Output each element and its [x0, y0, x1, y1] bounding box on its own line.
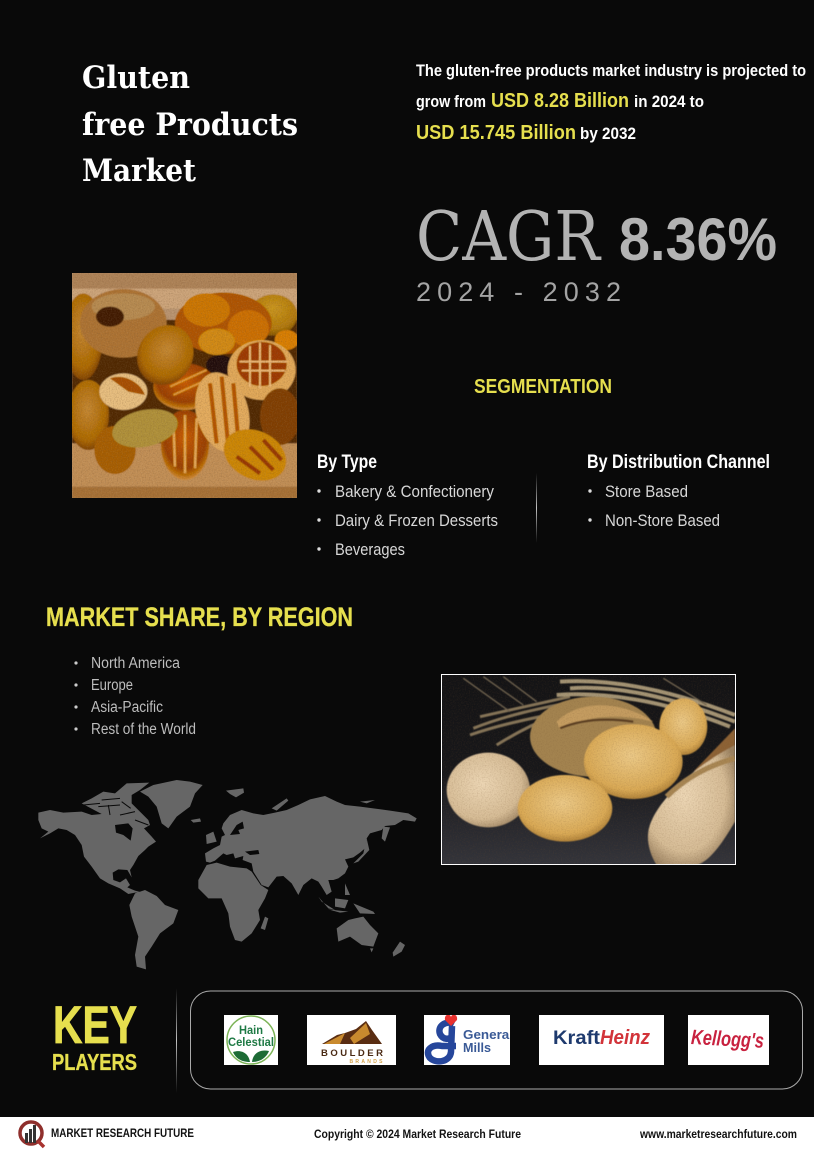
segment list: by type: [317, 452, 498, 559]
segment list: by distribution channel: Store Based: [605, 482, 688, 501]
segment list: by distribution channel: By Distribution Channel: [587, 452, 770, 473]
footer bar: [0, 1117, 814, 1150]
region list: Rest of the World: [91, 721, 196, 738]
segment list: by type: Bakery & Confectionery: [335, 482, 494, 501]
logo: General Mills: Mills: [463, 1041, 491, 1055]
CAGR figure: [416, 198, 777, 307]
icon: market research future logo: [20, 1122, 44, 1147]
title: Market: [82, 153, 197, 189]
logo: Kraft Heinz: Kraft: [553, 1028, 601, 1049]
logo: Kellogg's: Kellogg's: [690, 1026, 765, 1053]
logo: Kraft Heinz: [539, 1015, 664, 1065]
market size summary text: by 2032: [580, 124, 636, 143]
title: Gluten: [82, 60, 190, 96]
photo: bread rolls with wheat: [442, 674, 736, 865]
segment list: by type: Dairy & Frozen Desserts: [335, 511, 498, 530]
key players heading: [52, 996, 137, 1075]
CAGR figure: 8.36%: [619, 206, 777, 273]
logo: Hain Celestial: Hain: [239, 1023, 263, 1037]
CAGR figure: CAGR: [416, 198, 602, 277]
market share heading: MARKET SHARE, BY REGION: [46, 602, 353, 632]
footer brand name: MARKET RESEARCH FUTURE: [51, 1126, 194, 1140]
key players panel: [190, 991, 802, 1089]
logo: General Mills: General: [463, 1028, 513, 1042]
logo: Boulder Brands: BOULDER: [321, 1048, 383, 1059]
region list: North America: [91, 655, 180, 672]
market size summary text: [416, 61, 806, 144]
key players heading: KEY: [53, 996, 137, 1055]
logo: Boulder Brands: BRANDS: [350, 1059, 383, 1065]
logo: Hain Celestial: [224, 1015, 278, 1065]
segment list: by type: By Type: [317, 452, 377, 473]
world map: [38, 780, 417, 969]
key players heading: PLAYERS: [52, 1049, 137, 1075]
market size summary text: in 2024 to: [634, 92, 704, 111]
segmentation heading: SEGMENTATION: [474, 376, 612, 398]
title: [82, 60, 298, 189]
logo: Kraft Heinz: Heinz: [600, 1027, 650, 1049]
CAGR figure: 2024 - 2032: [416, 277, 621, 307]
title: free Products: [82, 107, 298, 143]
segment list: by distribution channel: [587, 452, 770, 530]
market size summary text: grow from: [416, 92, 486, 111]
market size summary text: USD 15.745 Billion: [416, 122, 576, 144]
logo: Hain Celestial: Celestial: [228, 1035, 274, 1049]
footer copyright: Copyright © 2024 Market Research Future: [314, 1127, 521, 1141]
logo: Boulder Brands: [307, 1015, 396, 1065]
logo: General Mills: [424, 1015, 513, 1065]
photo: gluten-free breads on wood: [64, 273, 300, 498]
region list: Asia-Pacific: [91, 699, 163, 716]
market size summary text: USD 8.28 Billion: [491, 90, 629, 112]
logo: Kellogg's: [688, 1015, 769, 1065]
segment list: by type: Beverages: [335, 540, 405, 559]
segment list: by distribution channel: Non-Store Based: [605, 511, 720, 530]
region list: [74, 655, 196, 738]
region list: Europe: [91, 677, 133, 694]
